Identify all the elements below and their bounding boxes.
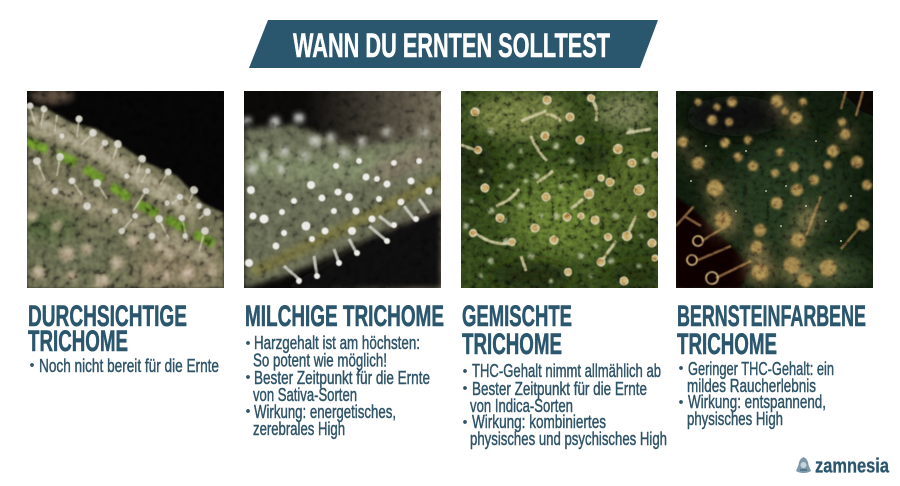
heading: durchsichtige trichome: TRICHOME [28, 325, 128, 358]
bullet list [463, 361, 667, 449]
bullet list: Geringer THC-Gehalt: ein [688, 359, 834, 379]
zamnesia logo [796, 456, 890, 478]
bullet list: mildes Raucherlebnis [687, 376, 816, 396]
heading: durchsichtige trichome: DURCHSICHTIGE [28, 300, 187, 333]
panel: milchige trichome [243, 91, 444, 439]
bullet list: Bester Zeitpunkt für die Ernte [472, 379, 647, 399]
bullet list: Noch nicht bereit für die Ernte [39, 356, 219, 376]
bullet list: So potent wie möglich! [253, 350, 387, 370]
heading: bernsteinfarbene trichome [677, 300, 866, 361]
heading: gemischte trichome: TRICHOME [462, 328, 562, 361]
bullet list: Wirkung: energetisches, [254, 402, 396, 422]
panel: bernsteinfarbene trichome [674, 91, 873, 429]
panel: durchsichtige trichome [12, 88, 227, 376]
photo: amber trichomes [676, 91, 873, 288]
bullet list: von Sativa-Sorten [253, 385, 357, 405]
heading: milchige trichome: MILCHIGE TRICHOME [245, 300, 444, 333]
photo: mixed trichomes [461, 91, 658, 288]
bullet list: Wirkung: kombiniertes [472, 412, 606, 432]
bullet list: Bester Zeitpunkt für die Ernte [254, 368, 430, 388]
bullet list: THC-Gehalt nimmt allmählich ab [472, 361, 661, 381]
title banner [249, 20, 658, 68]
heading: durchsichtige trichome [28, 300, 187, 358]
bullet list [679, 359, 834, 429]
photo: transparent trichomes [27, 91, 224, 288]
heading: gemischte trichome: GEMISCHTE [462, 300, 572, 333]
bullet list [246, 333, 430, 439]
panel: gemischte trichome [458, 91, 667, 449]
bullet list: zerebrales High [253, 419, 345, 439]
icon: logo mark [796, 457, 811, 473]
bullet list: physisches High [687, 409, 783, 429]
bullet list: von Indica-Sorten [470, 396, 573, 416]
title banner: WANN DU ERNTEN SOLLTEST [293, 27, 610, 65]
heading: gemischte trichome [462, 300, 572, 361]
heading: bernsteinfarbene trichome: TRICHOME [677, 328, 777, 361]
bullet list: physisches und psychisches High [470, 429, 667, 449]
bullet list: Wirkung: entspannend, [688, 392, 826, 412]
photo: milky trichomes [244, 91, 441, 288]
bullet list: Harzgehalt ist am höchsten: [254, 333, 420, 353]
